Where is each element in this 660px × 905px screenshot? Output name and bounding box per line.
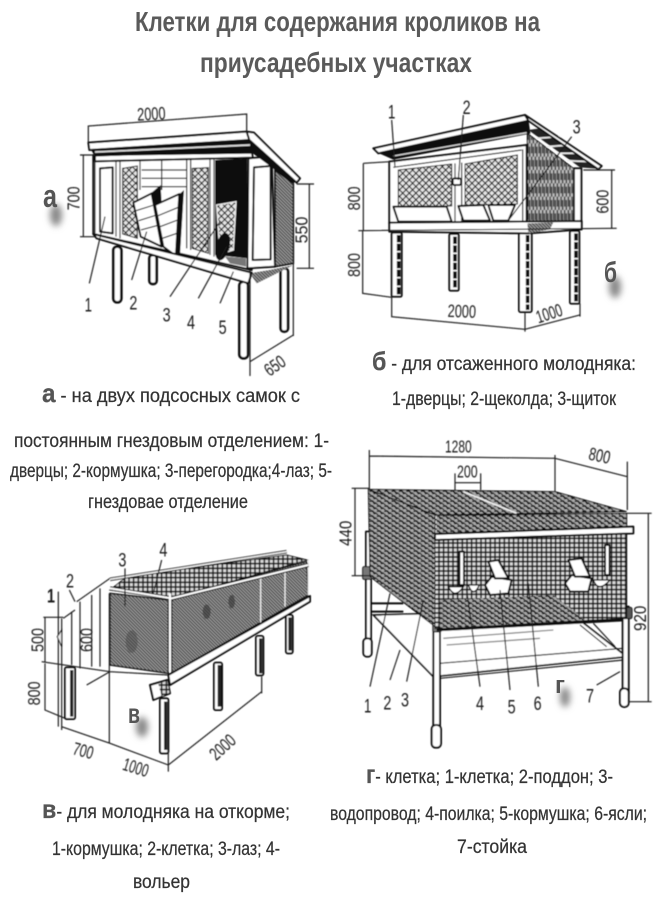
legs b [392, 231, 579, 312]
callouts g: 4 [476, 694, 484, 715]
dimensions b: 1000 [533, 300, 565, 327]
caption v: 1-кормушка; 2-клетка; 3-лаз; 4- [52, 838, 280, 860]
callouts g: 6 [534, 694, 542, 715]
floor board a [93, 234, 252, 283]
diagram v: cage for fattening young [24, 541, 310, 781]
callouts g [364, 583, 620, 718]
dimensions b: 600 [592, 190, 612, 214]
feeder and dimensions v: 1000 [120, 754, 151, 781]
posts g [363, 532, 632, 748]
tray g [370, 603, 627, 678]
caption a: а - на двух подсосных самок с [42, 378, 300, 408]
title [135, 6, 540, 78]
rails v [110, 552, 310, 700]
callouts a: 1 [85, 296, 92, 317]
callouts v [47, 541, 168, 607]
callouts g: 2 [383, 693, 391, 714]
dimensions g: 440 [336, 521, 356, 546]
callouts g: 5 [508, 697, 516, 718]
roof b [373, 115, 602, 169]
callouts a: 4 [187, 313, 195, 334]
feeder and dimensions v: 800 [24, 681, 44, 705]
callouts v: 3 [118, 551, 126, 572]
caption g [330, 759, 647, 858]
feeder and dimensions v [24, 578, 262, 781]
right side a [247, 157, 293, 283]
callouts b: 1 [388, 102, 395, 123]
cage body a [93, 149, 253, 270]
dimensions g: 800 [587, 444, 612, 468]
rail g [435, 527, 633, 540]
title: Клетки для содержания кроликов на [135, 6, 540, 37]
panel label g [555, 672, 570, 707]
caption g: 7-стойка [457, 836, 527, 858]
diagram b: cage for weaned young [344, 98, 617, 332]
caption a: постоянным гнездовым отделением: 1- [14, 430, 329, 452]
callouts b: 2 [463, 98, 471, 119]
callouts v: 2 [66, 571, 74, 592]
callouts a: 2 [129, 293, 137, 314]
callouts b [388, 98, 581, 218]
callouts v: 4 [159, 541, 168, 562]
long mesh v [126, 560, 308, 673]
roof a [88, 132, 300, 183]
front mesh g [435, 513, 627, 630]
left mesh g [368, 489, 435, 627]
callouts v: 1 [47, 586, 55, 607]
panel label g: г [555, 672, 565, 699]
dimensions a: 650 [260, 351, 289, 380]
floor b [389, 221, 582, 233]
dimensions a: 550 [292, 217, 312, 243]
dimensions g [336, 437, 652, 702]
top mesh g [368, 489, 627, 515]
legs v [65, 615, 293, 753]
panel label b: б [604, 257, 617, 289]
dimensions b: 800 [344, 253, 364, 277]
callouts g: 7 [586, 687, 594, 708]
feeders and drinkers g [448, 545, 610, 595]
dimensions g: 920 [630, 606, 650, 631]
panel label v [128, 698, 148, 737]
diagram a: cage for two nursing does [63, 103, 314, 380]
feeder and dimensions v: 600 [77, 628, 97, 652]
caption a: дверцы; 2-кормушка; 3-перегородка;4-лаз; 5- [10, 460, 332, 482]
dimensions a: 700 [63, 186, 83, 210]
callouts a [85, 217, 233, 339]
caption v: вольер [133, 871, 190, 893]
callouts g: 3 [401, 691, 409, 712]
caption g: г- клетка; 1-клетка; 2-поддон; 3- [366, 759, 613, 789]
side wall b [527, 133, 582, 223]
end mesh v [110, 593, 168, 673]
dimensions a: 2000 [137, 103, 166, 125]
dimensions b: 2000 [447, 301, 476, 322]
caption b [372, 346, 636, 410]
caption v: в- для молодняка на откорме; [42, 794, 290, 824]
dimensions b [344, 162, 617, 332]
dimensions b: 800 [344, 186, 364, 210]
top mesh v [110, 555, 307, 598]
feeder and dimensions v: 700 [71, 739, 96, 763]
diagram g: wire cage with stand [336, 437, 652, 748]
panel label a: а [43, 178, 57, 214]
caption b: б - для отсаженного молодняка: [372, 346, 636, 376]
feeder and dimensions v: 500 [27, 628, 47, 652]
panel label v: в [128, 698, 140, 729]
legs a [113, 247, 288, 358]
title: приусадебных участках [200, 47, 472, 78]
callouts a: 3 [163, 306, 171, 327]
caption a: гнездовае отделение [88, 491, 248, 513]
caption v [42, 794, 290, 893]
callouts a: 5 [219, 318, 227, 339]
dimensions g: 1280 [445, 437, 472, 457]
caption a [10, 378, 332, 513]
feeder and dimensions v: 2000 [205, 730, 240, 764]
dimensions a [63, 103, 314, 380]
callouts g: 1 [364, 697, 371, 718]
dimensions g: 200 [457, 462, 478, 482]
callouts b: 3 [573, 117, 581, 138]
cage front b [389, 145, 527, 223]
